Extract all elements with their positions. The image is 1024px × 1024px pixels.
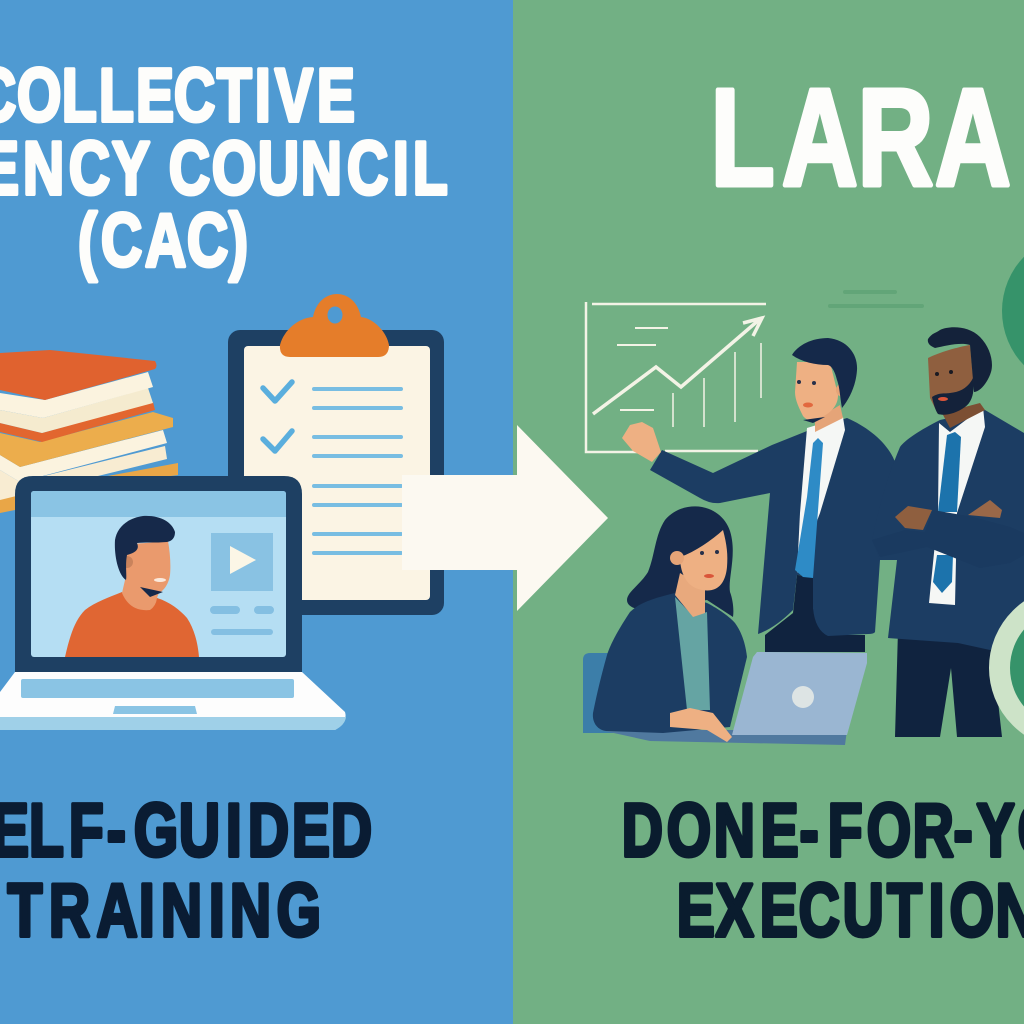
jacket and arm: [650, 418, 896, 636]
face: [680, 530, 727, 590]
laptop base: [0, 672, 346, 730]
circle: light green ring accent: [1000, 598, 1024, 738]
hands: [895, 506, 932, 530]
tie: [938, 432, 961, 512]
neck: [675, 573, 705, 617]
trousers: [895, 630, 1002, 737]
blouse: [675, 597, 710, 710]
heading: self-guided training: [0, 790, 372, 953]
text placeholder lines: [214, 606, 270, 614]
laptop screen frame: [15, 476, 302, 675]
person: man with crossed arms: [872, 327, 1024, 737]
arrow: from training to execution: [402, 425, 608, 611]
hair: [627, 506, 733, 617]
person: standing presenter: [622, 338, 896, 652]
face: [928, 345, 973, 414]
person: seated woman at laptop: [583, 506, 867, 745]
circle: dark green accent: [1002, 233, 1024, 389]
title: Collective Agency Council: [0, 55, 448, 283]
checklist lines: [314, 389, 401, 553]
hand: [670, 708, 732, 742]
shirt: [929, 407, 985, 605]
hair: [792, 338, 857, 408]
person on screen: [65, 516, 199, 657]
jacket: [872, 410, 1024, 650]
shirt: [797, 417, 845, 573]
panel: left blue background: [0, 0, 513, 1024]
panel: right green background: [513, 0, 1024, 1024]
heading: done-for-you execution: [622, 790, 1024, 953]
chair and desk: [583, 653, 620, 733]
trousers: [765, 575, 865, 652]
checkmarks: [263, 382, 292, 451]
decorative speed marks: [830, 292, 922, 306]
title: Collective Agency Council: (CAC): [78, 200, 248, 283]
title: LARA: LARA: [711, 60, 1011, 214]
face: [795, 362, 838, 421]
laptop: [732, 652, 867, 735]
beard: [932, 378, 974, 415]
hair: [928, 327, 992, 392]
tie: [795, 438, 823, 578]
hand: [622, 422, 661, 462]
chart: growth whiteboard: [586, 302, 766, 452]
neck: [942, 403, 985, 428]
video play button: [211, 533, 273, 591]
crossed arms: [872, 510, 1024, 568]
jacket: [593, 593, 747, 733]
clipboard clip: [280, 294, 389, 357]
icon: laptop with video lesson: [0, 476, 346, 730]
icon: clipboard checklist: [228, 294, 444, 615]
icon: stack of books: [0, 350, 178, 513]
neck: [815, 405, 843, 432]
heading: self-guided training: TRAINING: [7, 870, 321, 953]
